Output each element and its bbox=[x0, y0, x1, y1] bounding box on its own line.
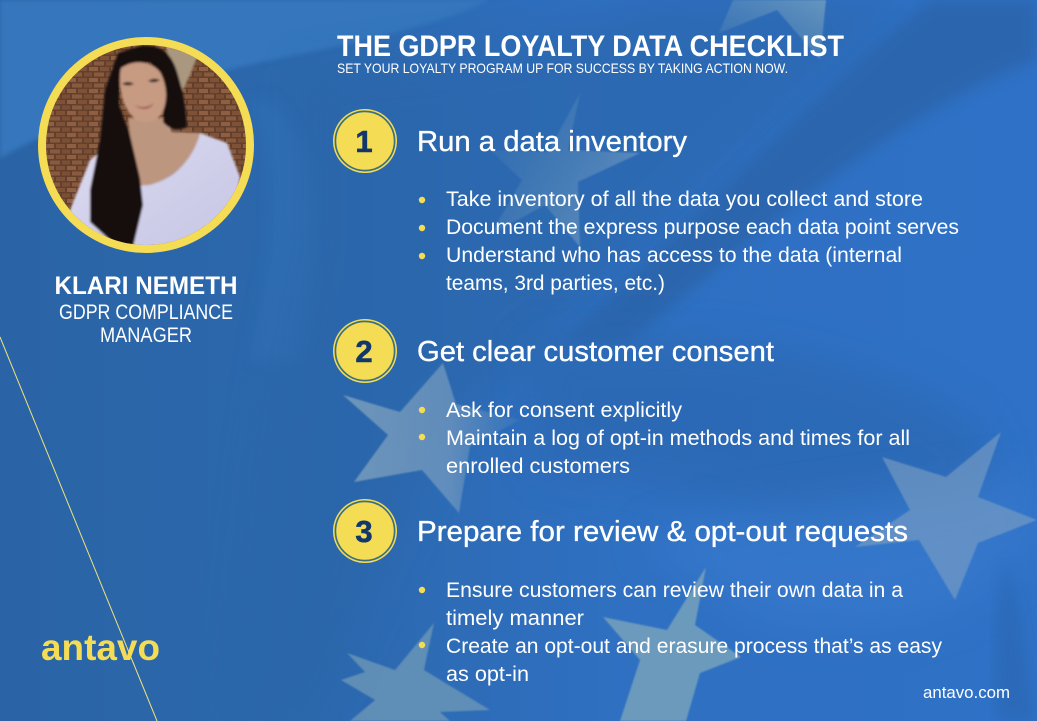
bullet list 2 bbox=[419, 399, 910, 478]
bullet list 1: teams, 3rd parties, etc.) bbox=[446, 272, 665, 295]
bullet list 3 bbox=[419, 579, 942, 686]
heading 2: Get clear customer consent bbox=[417, 336, 774, 368]
heading 3: Prepare for review & opt-out requests bbox=[417, 516, 908, 548]
website url: antavo.com bbox=[923, 683, 1010, 702]
bullet list 2: enrolled customers bbox=[446, 455, 630, 478]
section 2: customer consent bbox=[333, 319, 910, 478]
section 3: review and opt-out bbox=[333, 499, 942, 686]
number badge 1: 1 bbox=[355, 124, 373, 159]
bullet list 3: timely manner bbox=[446, 607, 584, 630]
number badge 1 bbox=[333, 109, 397, 173]
decorative yellow diagonal line bbox=[0, 337, 157, 721]
number badge 3: 3 bbox=[355, 514, 373, 549]
antavo logo: antavo bbox=[41, 627, 160, 668]
bullet list 3: Ensure customers can review their own data in a bbox=[446, 579, 903, 602]
bullet list 2: Maintain a log of opt-in methods and times for all bbox=[446, 427, 910, 450]
bullet list 3: Create an opt-out and erasure process that’s as easy bbox=[446, 635, 942, 658]
number badge 3 bbox=[333, 499, 397, 563]
bullet list 1: Take inventory of all the data you collect and store bbox=[446, 188, 923, 211]
portrait of Klari Nemeth bbox=[38, 37, 254, 253]
subtitle: SET YOUR LOYALTY PROGRAM UP FOR SUCCESS BY TAKING ACTION NOW. bbox=[337, 60, 788, 76]
section 1: data inventory bbox=[333, 109, 959, 295]
bullet list 1 bbox=[419, 188, 959, 295]
number badge 2: 2 bbox=[355, 334, 373, 369]
job title: GDPR COMPLIANCE bbox=[59, 301, 233, 324]
background stars bbox=[341, 0, 1037, 721]
title: THE GDPR LOYALTY DATA CHECKLIST bbox=[337, 30, 844, 63]
job title bbox=[59, 301, 233, 347]
bullet list 3: as opt-in bbox=[446, 663, 529, 686]
bullet list 1: Document the express purpose each data point serves bbox=[446, 216, 959, 239]
name: KLARI NEMETH bbox=[54, 272, 238, 300]
heading 1: Run a data inventory bbox=[417, 126, 687, 158]
number badge 2 bbox=[333, 319, 397, 383]
job title: MANAGER bbox=[100, 324, 192, 347]
bullet list 2: Ask for consent explicitly bbox=[446, 399, 682, 422]
bullet list 1: Understand who has access to the data (internal bbox=[446, 244, 902, 267]
